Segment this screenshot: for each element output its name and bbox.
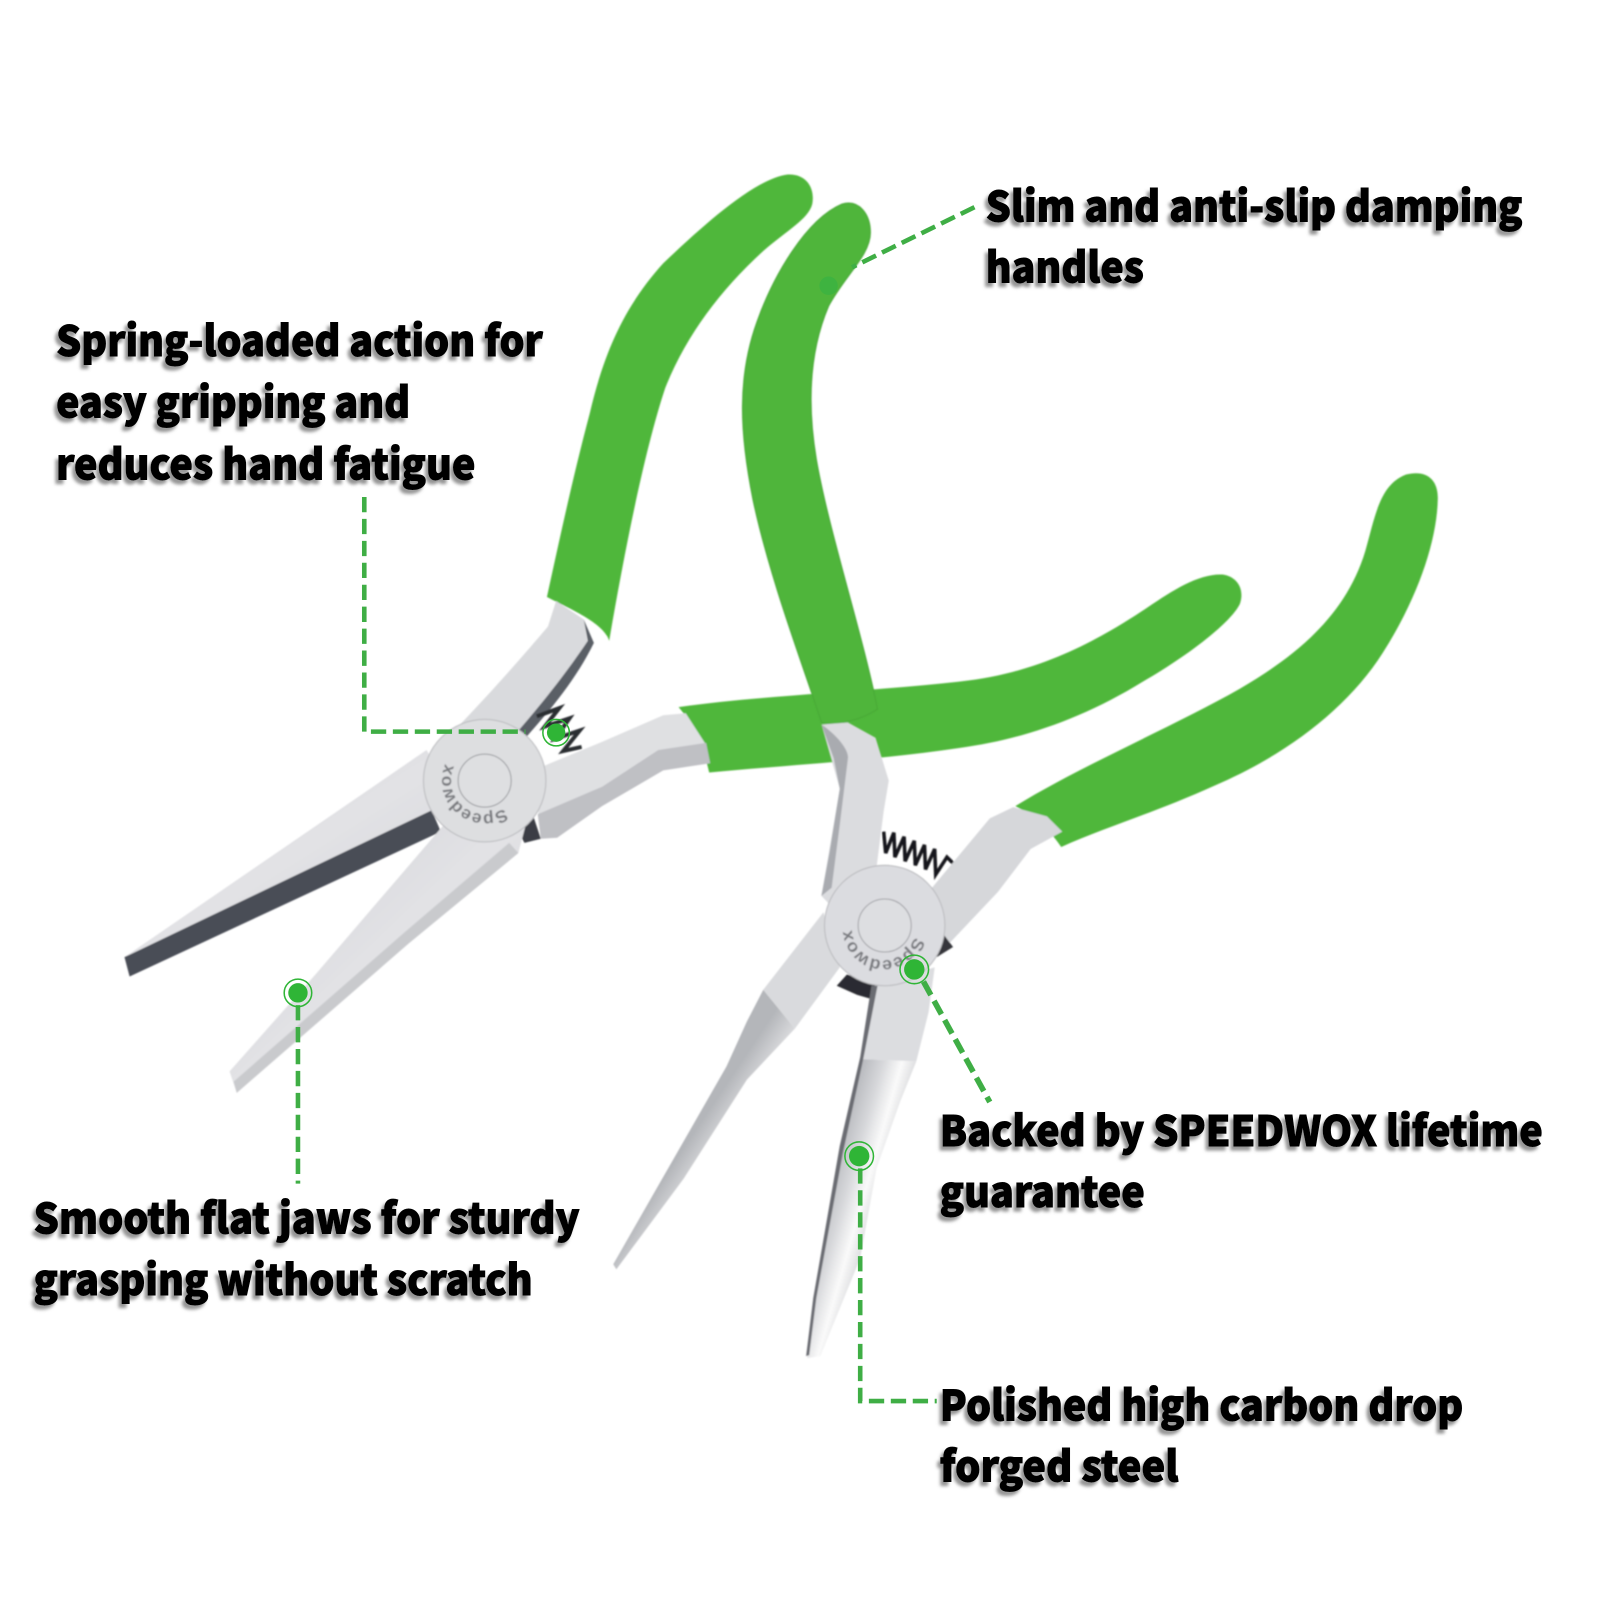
callout: steel leader (845, 1142, 937, 1401)
right needle jaw (806, 967, 935, 1358)
text: flat jaws (34, 1186, 580, 1308)
callout: spring leader (364, 497, 569, 746)
callout: guarantee leader (900, 955, 990, 1102)
spring (884, 832, 953, 874)
logo: Speedwox (842, 930, 925, 972)
handle: flat plier upper (547, 174, 813, 641)
lower flat jaw (230, 806, 531, 1093)
upper arm (821, 722, 926, 944)
jaw gap (837, 974, 876, 999)
text: guarantee (940, 1098, 1543, 1220)
text: flat jaws: Smooth flat jaws for sturdy (34, 1186, 580, 1247)
text: steel (940, 1372, 1463, 1495)
jaw edge highlight (234, 843, 518, 1093)
handle: needle plier right (1015, 473, 1438, 847)
text: handles: handles (986, 235, 1144, 296)
upper flat jaw (124, 750, 454, 977)
text: spring: easy gripping and (56, 369, 410, 430)
pivot disc (824, 864, 946, 986)
text: steel: Polished high carbon drop (940, 1372, 1463, 1433)
text: spring: reduces hand fatigue (56, 432, 476, 493)
spring (537, 708, 582, 751)
text: steel: forged steel (940, 1434, 1179, 1495)
text: flat jaws: grasping without scratch (34, 1247, 533, 1308)
right arm (515, 713, 710, 843)
plier: needle nose (612, 201, 1439, 1358)
text: handles (986, 173, 1523, 296)
text: guarantee: Backed by SPEEDWOX lifetime (940, 1098, 1543, 1159)
callout: flat jaws leader (284, 979, 312, 1184)
pivot disc (422, 718, 547, 843)
text: spring: Spring-loaded action for (56, 308, 543, 369)
handle: flat plier horizontal (679, 574, 1241, 772)
logo: Speedwox (441, 764, 508, 824)
upper arm (454, 601, 594, 737)
text: guarantee: guarantee (940, 1159, 1145, 1220)
handle: needle plier upper (742, 203, 878, 724)
text: handles: Slim and anti-slip damping (986, 173, 1523, 234)
callout: handles leader (819, 207, 974, 295)
left needle jaw (613, 912, 840, 1269)
right arm (929, 807, 1062, 957)
text: spring (56, 308, 543, 493)
plier: flat nose (124, 173, 1242, 1093)
